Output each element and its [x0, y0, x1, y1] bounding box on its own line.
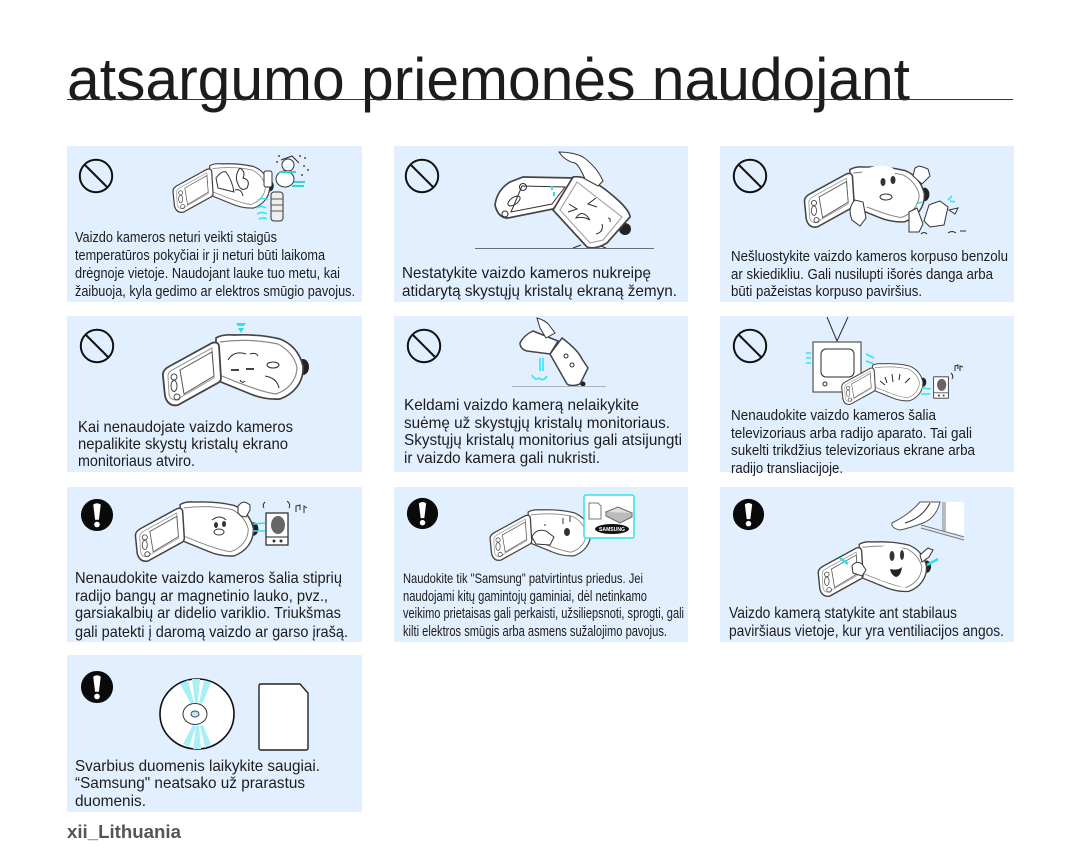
- panel: do not leave LCD open: [67, 316, 362, 472]
- title: atsargumo priemonės naudojant: [67, 46, 910, 113]
- text block: naudojami kitų gamintojų gaminiai, dėl netinkamo: [403, 589, 647, 605]
- text block: žaibuoja, kyla gedimo ar elektros smūgio pavojus.: [75, 284, 355, 300]
- text block: atidarytą skystųjų kristalų ekraną žemyn.: [402, 283, 677, 300]
- panel: do not lift by LCD: [394, 316, 688, 472]
- icon: prohibition: [80, 160, 112, 192]
- text block: [729, 605, 1004, 640]
- panel: Samsung accessories: [394, 487, 688, 642]
- icon: warning: [733, 499, 764, 530]
- icon: prohibition: [406, 160, 438, 192]
- ground line: [512, 386, 606, 387]
- text block: [75, 758, 320, 810]
- text block: [731, 408, 976, 477]
- illustration: camera tipped over: [495, 152, 631, 248]
- text block: monitoriaus atviro.: [78, 453, 195, 470]
- text block: [75, 230, 355, 300]
- icon: prohibition: [408, 330, 440, 362]
- illustration: window and curtain: [892, 502, 964, 540]
- text block: ar skiedikliu. Gali nusilupti išorės danga arba: [731, 267, 994, 283]
- text block: gali patekti į daromą vaizdo ar garso įrašą.: [75, 624, 348, 641]
- icon: prohibition: [81, 330, 113, 362]
- text block: garsiakalbių ar didelio variklio. Triukšmas: [75, 605, 341, 622]
- text block: Nestatykite vaizdo kameros nukreipę: [402, 265, 651, 282]
- text block: nepalikite skystų kristalų ekrano: [78, 436, 288, 453]
- text block: [402, 265, 677, 300]
- icon: water drop: [236, 323, 246, 333]
- icon: SD card: [259, 684, 308, 750]
- text block: [78, 419, 293, 470]
- illustration: camera falling: [520, 318, 588, 386]
- text block: “Samsung" neatsako už prarastus: [75, 775, 305, 792]
- panel: do not place screen down: [394, 146, 688, 302]
- icon: warning: [81, 499, 113, 531]
- icon: CD disc: [160, 679, 234, 749]
- panel: strong radio waves: [67, 487, 362, 642]
- text block: Keldami vaizdo kamerą nelaikykite: [404, 397, 639, 414]
- text block: [731, 249, 1008, 300]
- text block: radijo bangų ar magnetinio lauko, pvz.,: [75, 588, 328, 605]
- text block: suėmę už skystųjų kristalų monitoriaus.: [404, 415, 670, 432]
- text block: veikimo prietaisas gali perkaisti, užsiliepsnoti, sprogti, gali: [403, 606, 684, 622]
- accessories box: [584, 495, 634, 538]
- text block: būti pažeistas korpuso paviršius.: [731, 284, 922, 300]
- illustration: camera and loudspeaker: [135, 501, 307, 561]
- text block: [404, 397, 682, 467]
- footer page label: xii_Lithuania: [67, 822, 182, 842]
- text block: Vaizdo kameros neturi veikti staigūs: [75, 230, 277, 246]
- icon: warning: [81, 671, 113, 703]
- panel: stable ventilated place: [720, 487, 1014, 642]
- accessories box: SAMSUNG: [599, 527, 625, 533]
- panel: back up data: [67, 655, 362, 812]
- panel: do not wipe with benzene: [720, 146, 1014, 302]
- illustration: scared camera and solvent bottles: [804, 166, 966, 234]
- text block: Nenaudokite vaizdo kameros šalia stiprių: [75, 570, 342, 587]
- icon: warning: [407, 498, 438, 529]
- ground line: [475, 248, 654, 249]
- text block: Nenaudokite vaizdo kameros šalia: [731, 408, 937, 424]
- text block: Naudokite tik "Samsung" patvirtintus priedus. Jei: [403, 570, 643, 586]
- panel: temperature and humidity: [67, 146, 362, 302]
- text block: kilti elektros smūgis arba asmens sužalojimo pavojus.: [403, 624, 667, 640]
- text block: duomenis.: [75, 793, 146, 810]
- icon: prohibition: [734, 160, 766, 192]
- illustration: happy camera: [818, 542, 938, 596]
- text block: [403, 570, 684, 640]
- text block: drėgnoje vietoje. Naudojant lauke tuo metu, kai: [75, 266, 340, 282]
- illustration: sleepy camera: [163, 335, 309, 405]
- text block: radijo transliacijoje.: [731, 461, 843, 477]
- illustration: camera in snow: [173, 156, 308, 221]
- icon: prohibition: [734, 330, 766, 362]
- text block: Kai nenaudojate vaizdo kameros: [78, 419, 293, 436]
- text block: Nešluostykite vaizdo kameros korpuso benzolu: [731, 249, 1008, 265]
- text block: Vaizdo kamerą statykite ant stabilaus: [729, 605, 957, 622]
- panel: not near TV or radio: [720, 316, 1014, 477]
- text block: sukelti trikdžius televizoriaus ekrane arba: [731, 443, 976, 459]
- illustration: TV, camera and speaker: [806, 317, 963, 404]
- text block: paviršiaus vietoje, kur yra ventiliacijos angos.: [729, 623, 1004, 640]
- text block: Skystųjų kristalų monitorius gali atsijungti: [404, 432, 682, 449]
- text block: ir vaizdo kamera gali nukristi.: [404, 450, 600, 467]
- text block: temperatūros pokyčiai ir ji neturi būti laikoma: [75, 248, 326, 264]
- text block: televizoriaus arba radijo aparato. Tai gali: [731, 426, 972, 442]
- text block: [75, 570, 348, 641]
- illustration: camera with accessories: [490, 510, 595, 560]
- text block: Svarbius duomenis laikykite saugiai.: [75, 758, 320, 775]
